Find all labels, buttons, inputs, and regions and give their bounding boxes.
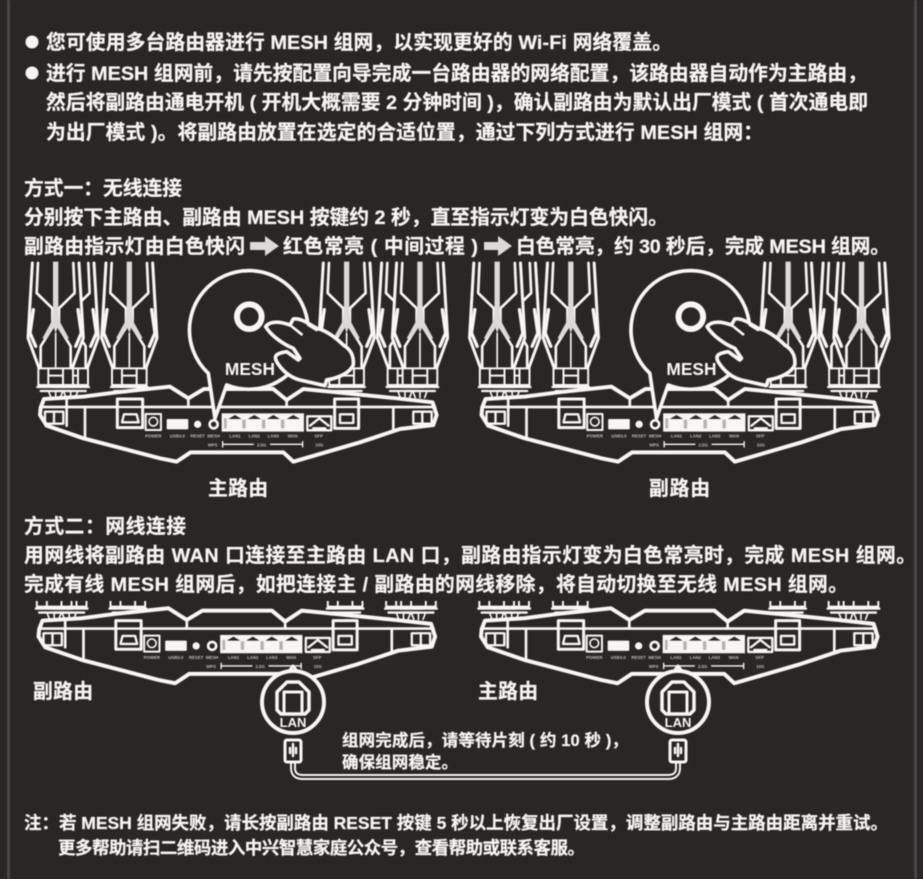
icon: LAN port callout, main router (647, 666, 709, 733)
router diagram: secondary router wired (26, 482, 447, 683)
icon: cable plug left (285, 740, 301, 762)
label: main router: 主路由 (478, 681, 538, 703)
bullet 2: 进行 MESH 组网前，请先按配置向导完成一台路由器的网络配置，该路由器自动作为主路由， (46, 62, 867, 85)
method two instructions: 用网线将副路由 WAN 口连接至主路由 LAN 口，副路由指示灯变为白色常亮时，完成 MESH 组网。 (24, 544, 916, 567)
method one instructions (24, 206, 890, 258)
method two instructions (24, 544, 916, 596)
cable note (342, 730, 628, 772)
router diagram: main router wired (468, 482, 889, 683)
cable note: 组网完成后，请等待片刻 ( 约 10 秒 )， (342, 730, 628, 750)
heading: method two: 方式二：网线连接 (24, 515, 186, 538)
method one instructions: 分别按下主路由、副路由 MESH 按键约 2 秒，直至指示灯变为白色快闪。 (24, 206, 668, 229)
label: main router: 主路由 (208, 478, 268, 500)
footnote: 更多帮助请扫二维码进入中兴智慧家庭公众号，查看帮助或联系客服。 (58, 838, 585, 858)
bullet 2: 为出厂模式 )。将副路由放置在选定的合适位置，通过下列方式进行 MESH 组网： (46, 121, 763, 144)
intro bullet list (26, 31, 868, 144)
label: secondary router: 副路由 (649, 478, 710, 500)
method one instructions: 白色常亮，约 30 秒后，完成 MESH 组网。 (516, 235, 890, 258)
bullet 2 (26, 62, 868, 144)
router diagram: main router with MESH button press (27, 260, 448, 462)
network cable between routers (293, 760, 678, 777)
label: secondary router: 副路由 (33, 681, 93, 703)
method one instructions: 副路由指示灯由白色快闪 (24, 236, 245, 258)
method one instructions: 红色常亮 ( 中间过程 ) (283, 235, 478, 258)
heading: method one: 方式一：无线连接 (24, 177, 182, 200)
router diagram: secondary router with MESH button press (469, 260, 890, 462)
bullet 1: 您可使用多台路由器进行 MESH 组网，以实现更好的 Wi-Fi 网络覆盖。 (46, 31, 672, 54)
icon: cable plug right (670, 740, 686, 762)
footnote: 注：若 MESH 组网失败，请长按副路由 RESET 按键 5 秒以上恢复出厂设置，调整副路由与主路由距离并重试。 (24, 813, 888, 833)
footnote (24, 813, 888, 858)
bullet 2: 然后将副路由通电开机 ( 开机大概需要 2 分钟时间 )，确认副路由为默认出厂模式 ( 首次通电即 (46, 91, 868, 114)
cable note: 确保组网稳定。 (342, 752, 458, 772)
icon: LAN port callout, secondary router (262, 666, 324, 733)
method two instructions: 完成有线 MESH 组网后，如把连接主 / 副路由的网线移除，将自动切换至无线 MESH 组网。 (24, 573, 848, 596)
